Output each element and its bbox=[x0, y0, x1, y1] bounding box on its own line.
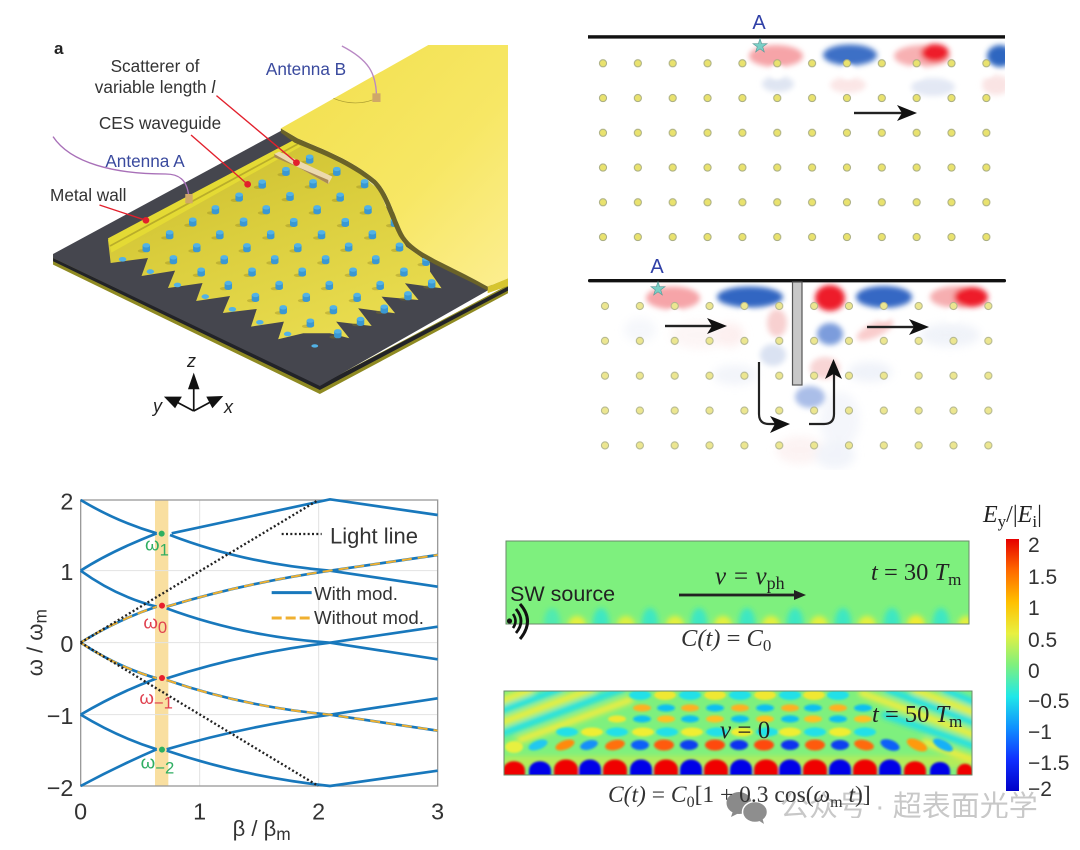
metal wall bbox=[108, 140, 301, 253]
y tick labels: 0 bbox=[60, 631, 73, 657]
panel: field map without scatterer bbox=[586, 12, 1013, 254]
x axis title: β / β bbox=[233, 816, 276, 841]
field intensity bbox=[749, 44, 1013, 96]
time label: t = 50 T bbox=[872, 701, 949, 728]
top wall line bbox=[588, 279, 1006, 282]
legend: with modulation bbox=[272, 583, 398, 604]
x axis title: m bbox=[276, 824, 291, 844]
panel: band diagram bbox=[23, 488, 444, 844]
label: Antenna B: Antenna B bbox=[266, 59, 346, 79]
SW source label: SW source bbox=[510, 582, 615, 606]
propagation arrow bbox=[854, 105, 917, 121]
arrow right before scatterer bbox=[665, 318, 727, 334]
yellow waveguide floor with sawtooth edge bbox=[108, 142, 442, 339]
axis labels: x bbox=[223, 397, 234, 417]
gradient bar bbox=[1006, 539, 1019, 791]
pillar lattice bbox=[119, 154, 435, 348]
y tick labels: −1 bbox=[47, 703, 73, 729]
field intensity bbox=[624, 285, 988, 469]
time label: m bbox=[948, 570, 961, 589]
modulated capacitance formula: t bbox=[843, 782, 855, 808]
panel: field map with modulation bbox=[498, 689, 980, 811]
red leader lines bbox=[99, 96, 300, 224]
scatterer bar bbox=[274, 152, 332, 184]
omega labels bbox=[139, 534, 174, 777]
tick labels: 0 bbox=[1028, 660, 1040, 683]
top wall line bbox=[588, 35, 1005, 39]
modulated capacitance formula: C(t) = C bbox=[608, 782, 687, 808]
colorbar title: E bbox=[1018, 502, 1032, 528]
scatterer lattice bbox=[586, 46, 1004, 254]
y tick labels: 2 bbox=[60, 488, 73, 514]
omega labels: ω bbox=[139, 687, 154, 708]
velocity zero label: v = 0 bbox=[720, 717, 770, 744]
panel: field map with scatterer bbox=[588, 256, 1006, 469]
band markers bbox=[159, 531, 165, 753]
capacitance formula: C(t) = C bbox=[681, 625, 763, 652]
time label: m bbox=[949, 712, 962, 731]
curved arrow up around scatterer bbox=[809, 359, 842, 424]
label: Antenna A: Antenna A bbox=[105, 151, 185, 171]
modulated capacitance formula: [1 + 0.3 cos( bbox=[695, 782, 814, 808]
colorbar title: /| bbox=[1006, 502, 1018, 528]
capacitance formula: 0 bbox=[763, 636, 771, 655]
omega labels: 0 bbox=[158, 618, 167, 637]
y tick labels: −2 bbox=[47, 775, 73, 801]
omega labels: ω bbox=[143, 611, 158, 632]
velocity label: ph bbox=[767, 573, 785, 593]
omega labels: −2 bbox=[155, 758, 174, 777]
omega labels: 1 bbox=[160, 540, 169, 559]
source wave icon bbox=[507, 604, 528, 639]
velocity label: v = v bbox=[715, 563, 767, 590]
dark metal base plate bbox=[53, 130, 508, 394]
highlighted band strip bbox=[155, 500, 168, 786]
axis labels: z bbox=[186, 351, 196, 371]
green field with surface wave bbox=[506, 542, 968, 624]
yellow top plate bbox=[281, 45, 508, 293]
tick labels: −1.5 bbox=[1028, 752, 1069, 775]
legend: with modulation: With mod. bbox=[314, 583, 398, 604]
colorbar title: | bbox=[1037, 502, 1042, 528]
modulated capacitance formula: 0 bbox=[687, 794, 695, 811]
colorbar title: E bbox=[983, 502, 998, 528]
tick labels: 1.5 bbox=[1028, 566, 1057, 589]
panel letter a: a bbox=[54, 39, 64, 58]
plot frame and grid bbox=[81, 500, 438, 786]
x tick labels: 3 bbox=[431, 798, 444, 824]
light line bbox=[81, 500, 318, 786]
with modulation curves bbox=[81, 499, 438, 786]
omega labels: ω bbox=[145, 534, 160, 555]
antenna position A: A bbox=[752, 12, 766, 34]
watermark icon bbox=[726, 792, 768, 824]
modulated capacitance formula: ω bbox=[814, 782, 830, 808]
y tick labels: 1 bbox=[60, 559, 73, 585]
curved arrow down around scatterer bbox=[759, 362, 790, 433]
colorbar title: y bbox=[998, 512, 1007, 531]
antenna position A: A bbox=[650, 256, 664, 278]
time label: t = 30 T bbox=[871, 559, 948, 586]
panel: field map without modulation bbox=[506, 541, 974, 655]
scatterer lattice bbox=[588, 289, 1006, 463]
tick labels: 2 bbox=[1028, 534, 1040, 557]
y tick labels bbox=[47, 488, 73, 801]
y axis title: m bbox=[31, 609, 51, 624]
label: scatterer: Scatterer of bbox=[111, 56, 200, 76]
legend: light line: Light line bbox=[330, 523, 418, 548]
x tick labels bbox=[74, 798, 444, 824]
axis triad bbox=[164, 373, 223, 411]
axis labels: y bbox=[151, 396, 163, 416]
omega labels: −1 bbox=[154, 694, 173, 713]
tick labels: −1 bbox=[1028, 721, 1052, 744]
tick labels: −2 bbox=[1028, 778, 1052, 801]
panel: waveguide device 3D schematic bbox=[50, 39, 508, 417]
x tick labels: 1 bbox=[193, 798, 206, 824]
legend: without modulation: Without mod. bbox=[314, 607, 424, 628]
label: CES waveguide: CES waveguide bbox=[99, 113, 221, 133]
tick labels bbox=[1028, 534, 1069, 801]
antenna A wire and connector bbox=[53, 137, 193, 203]
legend: light line bbox=[282, 523, 418, 548]
tick labels: −0.5 bbox=[1028, 690, 1069, 713]
modulated capacitance formula: m bbox=[830, 794, 843, 811]
antenna B wire and connector bbox=[333, 46, 381, 103]
omega labels: ω bbox=[141, 752, 155, 773]
metal scatterer bbox=[792, 282, 802, 385]
axis labels bbox=[151, 351, 234, 417]
arrow right after scatterer bbox=[867, 319, 929, 335]
label: Metal wall: Metal wall bbox=[50, 185, 126, 205]
without modulation dashed curves bbox=[81, 555, 438, 731]
tick labels: 0.5 bbox=[1028, 629, 1057, 652]
x tick labels: 0 bbox=[74, 798, 87, 824]
colorbar bbox=[982, 502, 1069, 801]
y axis title: ω / ω bbox=[23, 624, 48, 676]
antenna position A bbox=[650, 256, 665, 295]
modulated capacitance formula: )] bbox=[855, 782, 871, 808]
tick labels: 1 bbox=[1028, 597, 1040, 620]
standing wave field bbox=[498, 689, 980, 776]
antenna position A bbox=[752, 12, 767, 52]
velocity arrow bbox=[679, 590, 806, 600]
label: variable length: variable length l bbox=[95, 77, 216, 97]
colorbar title: i bbox=[1032, 512, 1037, 531]
x tick labels: 2 bbox=[312, 798, 325, 824]
watermark text: 公众号 · 超表面光学 bbox=[780, 790, 1038, 823]
